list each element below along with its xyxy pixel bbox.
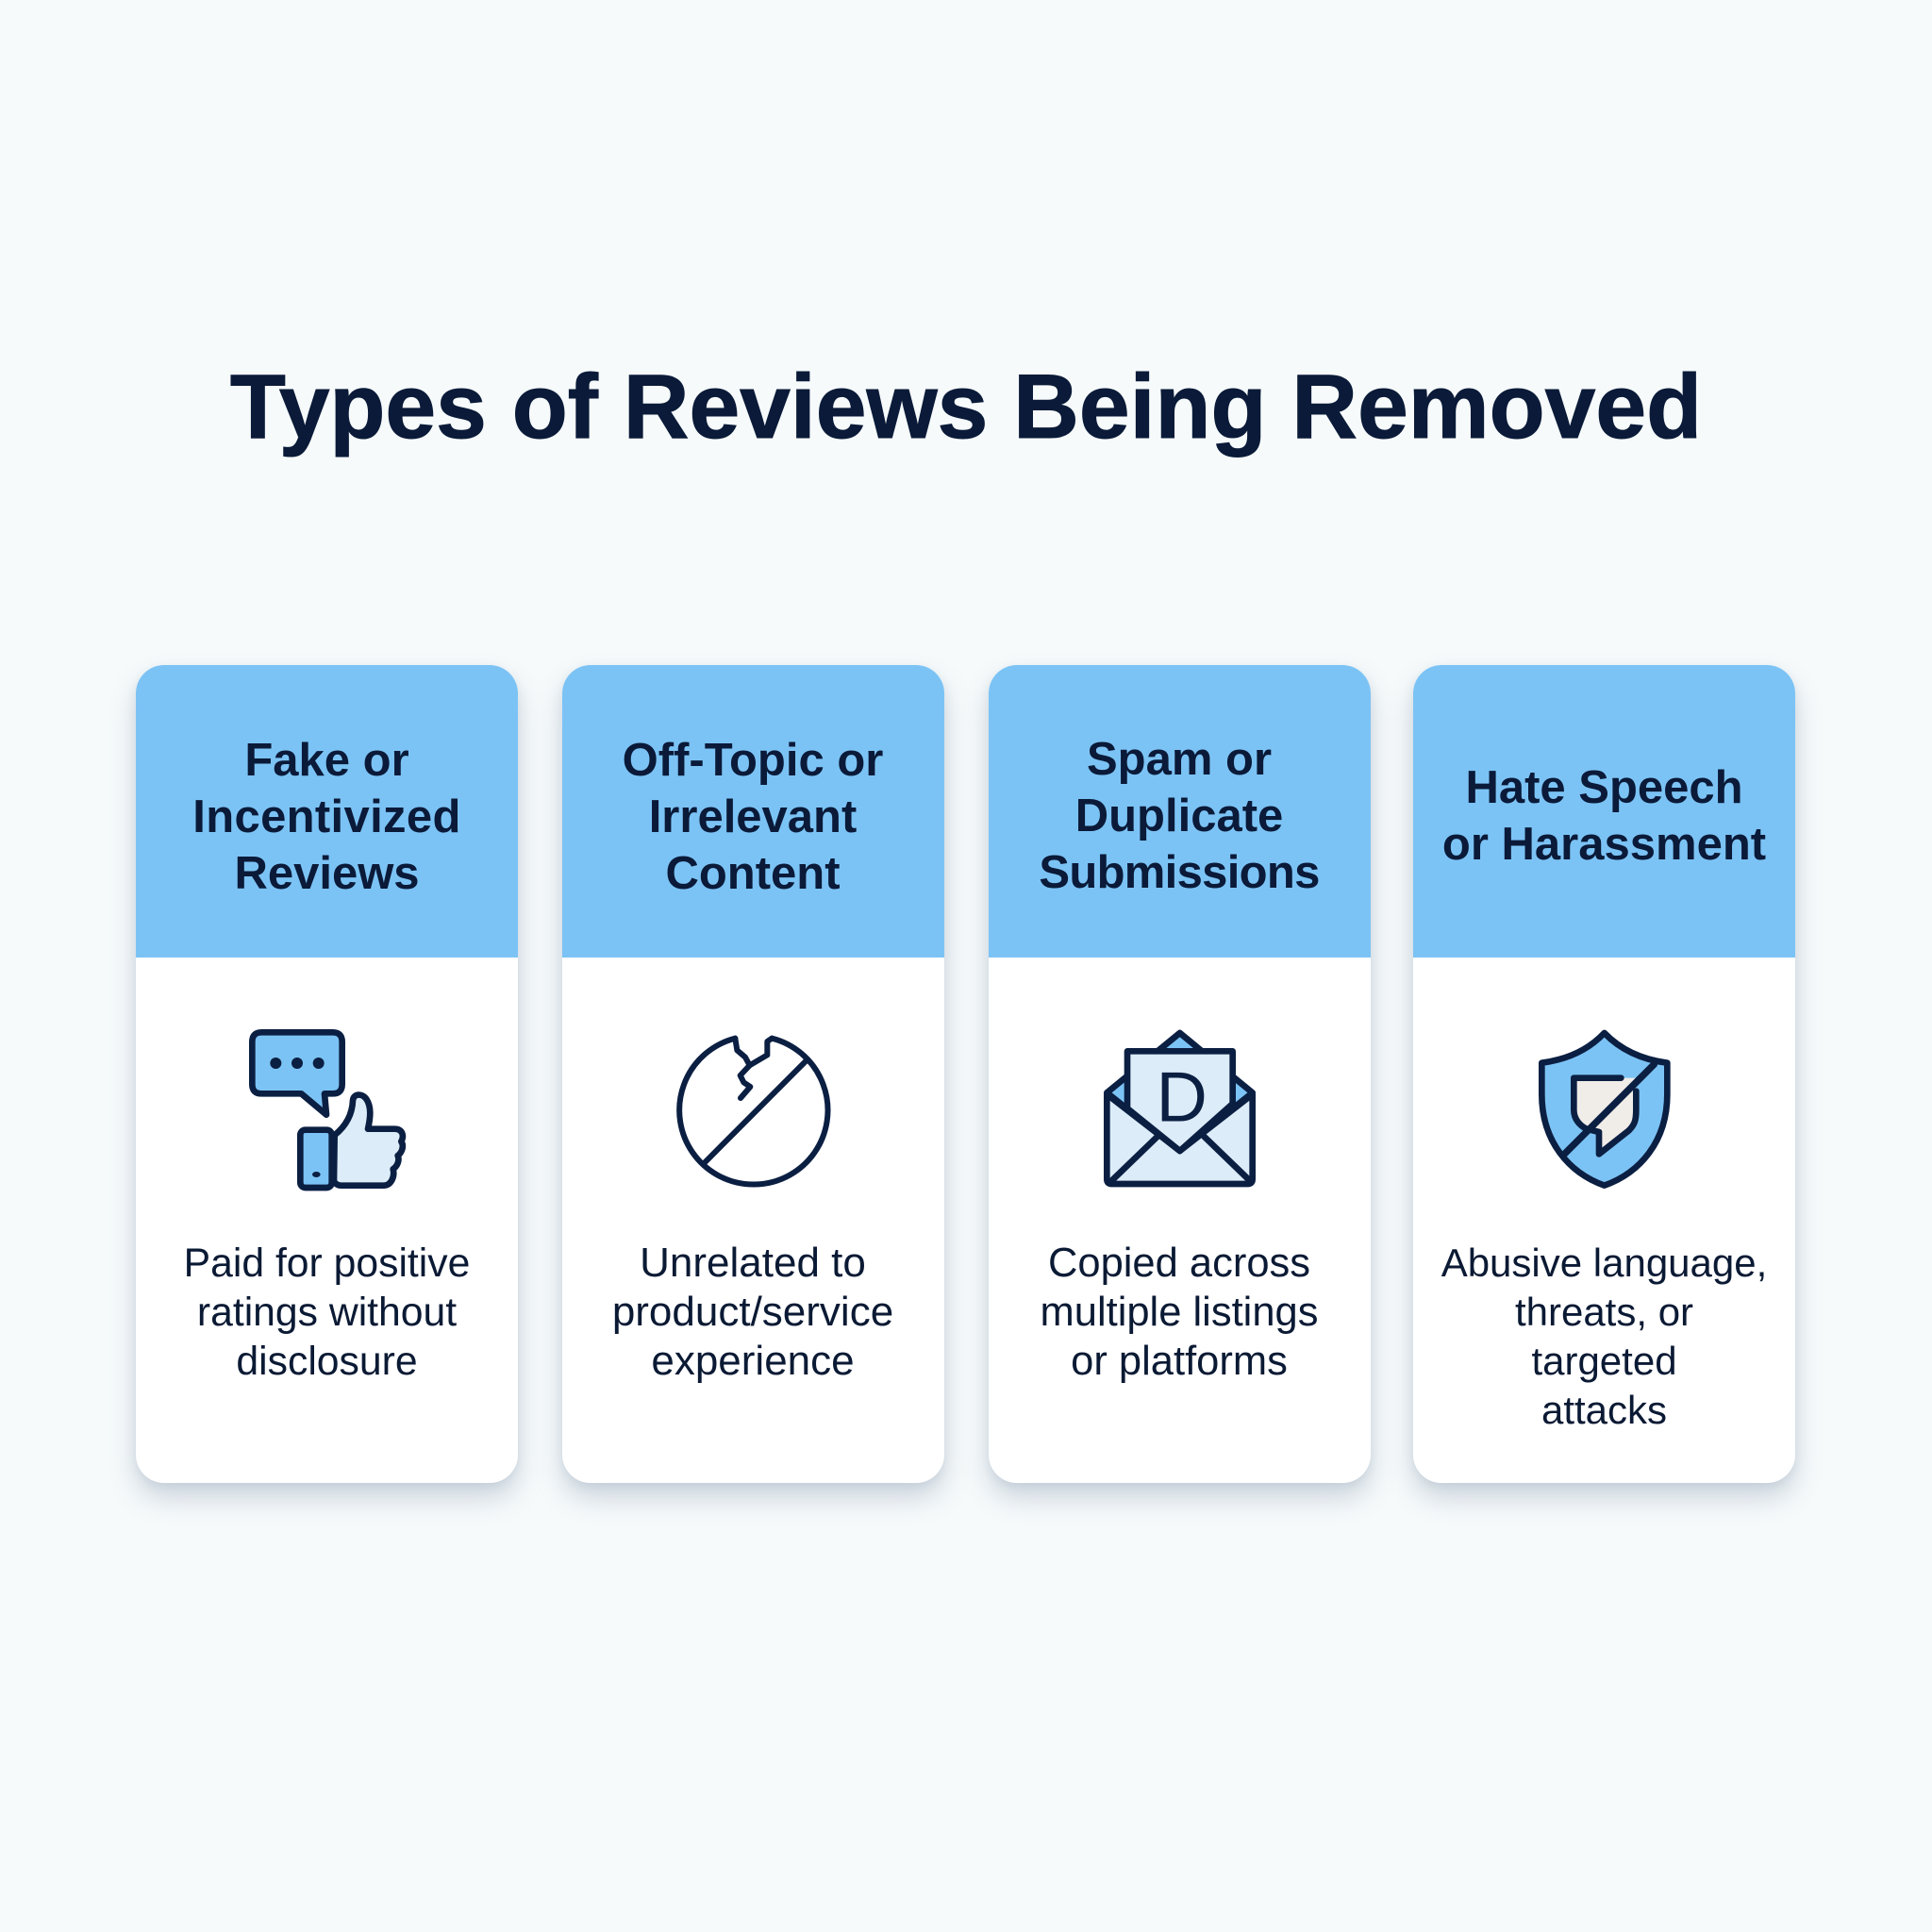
title: Types of Reviews Being Removed [230,357,1702,458]
icon: shield with crossed out speech bubble [1539,1030,1671,1189]
description: off-topic: Unrelated to [640,1240,866,1286]
description: fake: ratings without [197,1290,457,1335]
panel header: spam [989,665,1370,958]
panel header: off-topic: Content [665,848,841,899]
description: hate speech: threats, or [1515,1290,1693,1334]
description: fake [184,1241,470,1384]
icon: open envelope with letter D: D [1156,1057,1208,1136]
description: hate speech: Abusive language, [1441,1241,1767,1285]
panel header: fake or incentivized: Incentivized [192,791,461,842]
description: spam: Copied across [1048,1241,1310,1286]
panel header: spam: Submissions [1039,847,1320,898]
description: spam: multiple listings [1041,1290,1318,1335]
panel header: hate speech: Hate Speech [1465,762,1743,813]
panel header: spam: Spam or [1087,734,1272,785]
description: off-topic: experience [651,1338,855,1384]
description: fake: Paid for positive [184,1241,470,1286]
description: hate speech [1441,1241,1767,1432]
panel header: fake or incentivized: Fake or [244,735,409,786]
description: spam [1041,1241,1318,1384]
panel header: hate speech [1413,665,1795,958]
panel: fake or incentivized reviews [136,665,518,1483]
icon: open envelope with letter D [1104,1030,1256,1187]
panel header: hate speech: or Harassment [1442,819,1766,870]
icon: speech bubble and thumbs up [249,1029,406,1191]
description: hate speech: attacks [1541,1388,1667,1432]
panel header: off-topic [562,665,943,958]
panel header: off-topic: Off-Topic or [623,735,883,786]
description: fake: disclosure [236,1339,418,1384]
panel: hate speech or harassment [1413,665,1795,1483]
icon: cracked prohibited circle [676,1036,831,1187]
panel: off-topic or irrelevant content [562,665,943,1483]
panel header: fake or incentivized [136,665,518,958]
description: off-topic: product/service [612,1289,893,1335]
panel: spam or duplicate submissions [989,665,1370,1483]
panel header: spam: Duplicate [1075,791,1283,841]
description: hate speech: targeted [1531,1339,1677,1383]
panel header: fake or incentivized: Reviews [234,848,420,899]
panel header: off-topic: Irrelevant [649,791,857,842]
description: off-topic [612,1240,893,1384]
description: spam: or platforms [1071,1339,1288,1384]
